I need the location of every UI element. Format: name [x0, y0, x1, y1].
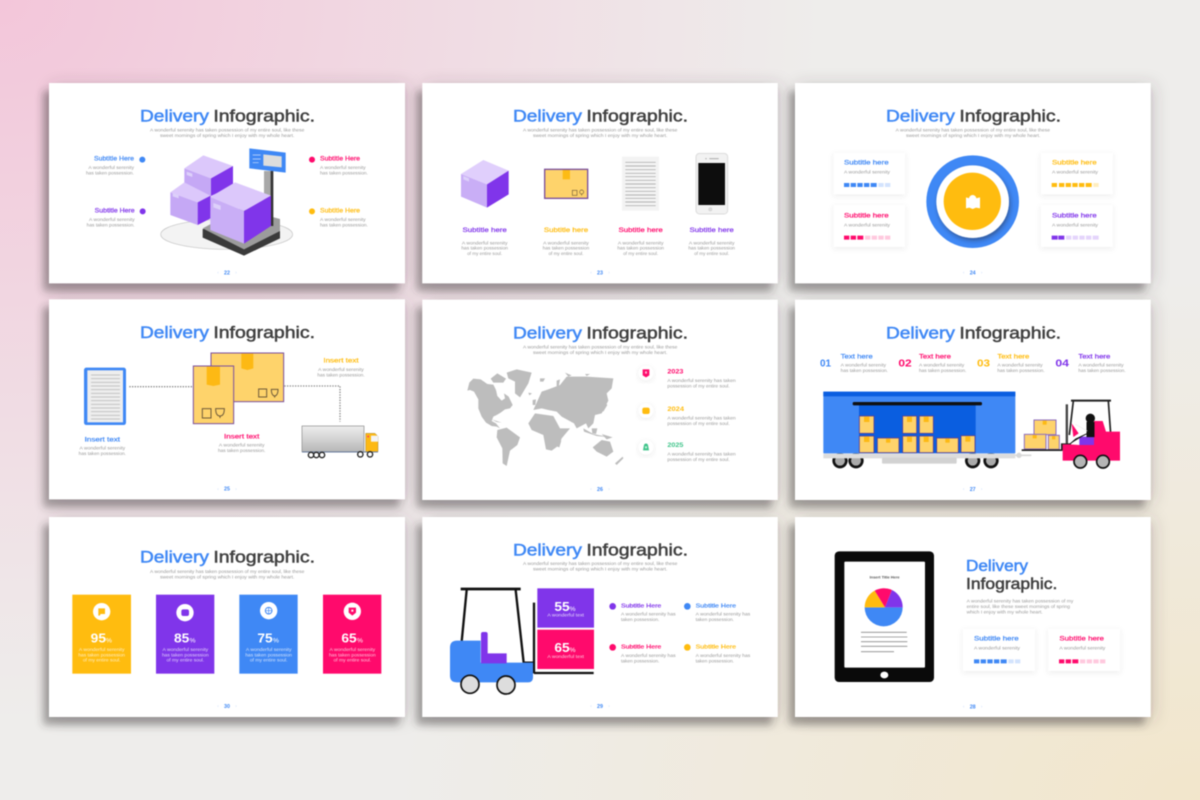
card: purple [1041, 205, 1113, 247]
item: pink subtitle: A wonderful serenity [618, 240, 664, 245]
timeline item 2024 [639, 403, 736, 426]
step 01: A wonderful serenity [841, 363, 887, 368]
card: 95%: % [106, 638, 112, 645]
callout: pink subtitle: Subtitle Here [621, 645, 661, 651]
intro text [896, 128, 1050, 138]
page number: 27 [970, 487, 976, 493]
card: 75%: % [273, 638, 279, 645]
step 01: 01 [820, 358, 831, 369]
callout: purple subtitle: A wonderful serenity has [621, 612, 676, 617]
card: yellow: Subtitle here [1052, 161, 1098, 167]
page number: ‹ [590, 270, 592, 275]
page number: ‹ [963, 487, 965, 492]
callout: yellow subtitle: Subtitle Here [696, 645, 736, 651]
text: insert blue [79, 437, 126, 456]
item: purple subtitle: Subtitle here [462, 228, 508, 234]
step 03: A wonderful serenity [997, 363, 1043, 368]
text: insert blue: A wonderful serenity [79, 446, 126, 451]
page number: 23 [597, 270, 603, 276]
icon: rear parcel [211, 353, 284, 402]
title: Infographic. [959, 324, 1061, 343]
timeline item 2023: possession of my entire soul. [667, 383, 730, 388]
page number [217, 270, 237, 276]
page number: ‹ [963, 270, 965, 275]
card: blue: Subtitle here [844, 161, 890, 167]
callout: purple subtitle: Subtitle Here [621, 603, 661, 609]
title: Delivery [513, 541, 583, 560]
icon: document [622, 157, 659, 211]
item: yellow subtitle: Subtitle here [544, 228, 589, 234]
text: insert yellow [317, 358, 365, 377]
title: Infographic. [586, 107, 688, 126]
item: pink subtitle: Subtitle here [618, 228, 664, 234]
callout: pink subtitle [309, 157, 368, 175]
timeline item 2025: 2025 [667, 442, 684, 449]
step 04: has taken possession. [1078, 368, 1126, 373]
title: Infographic. [586, 541, 688, 560]
text: insert yellow: has taken possession. [317, 372, 365, 377]
item: second purple subtitle: has taken possession [688, 246, 735, 251]
icon: document on tablet [84, 368, 126, 425]
step 01: has taken possession. [841, 368, 888, 373]
page number [590, 487, 610, 493]
timeline item 2024: possession of my entire soul. [667, 421, 730, 426]
card: 95%: A wonderful serenity [79, 647, 125, 652]
card: 65%: 65 [341, 632, 357, 646]
timeline item 2025: A wonderful serenity has taken [667, 452, 736, 457]
item: second purple subtitle: A wonderful serenity [689, 240, 735, 245]
item: yellow subtitle: of my entire soul. [548, 251, 583, 256]
card: blue [963, 629, 1035, 671]
callout: pink subtitle: A wonderful serenity [320, 165, 366, 170]
page number: › [235, 486, 237, 491]
intro text [523, 128, 678, 138]
step 01 [820, 355, 888, 373]
page number: ‹ [590, 704, 592, 709]
step 02: 02 [898, 358, 912, 369]
text: insert pink: A wonderful serenity [219, 443, 265, 448]
callout: yellow subtitle: Subtitle Here [320, 209, 361, 215]
callout: blue subtitle: A wonderful serenity [88, 165, 135, 170]
card: 75%: 75 [257, 632, 273, 646]
card: 95%: of my entire soul. [83, 658, 120, 663]
page number: › [235, 704, 237, 709]
card: 75%: has taken possession [245, 652, 292, 657]
item: second purple subtitle: Subtitle here [689, 228, 735, 234]
stat block: 65%: 65 [554, 640, 570, 655]
title: Infographic. [966, 576, 1057, 593]
icon: smartphone [696, 153, 728, 214]
page number: 29 [597, 704, 603, 710]
panel: percentage cards (slide 30) [49, 517, 405, 717]
page number: › [608, 487, 610, 492]
intro text: sweet mornings of spring which I enjoy with my whole heart. [533, 566, 667, 571]
illustration: blue forklift [450, 589, 594, 694]
page number: 25 [224, 487, 230, 493]
timeline item 2024: A wonderful serenity has taken [667, 416, 736, 421]
intro text: A wonderful serenity has taken possession of my [967, 599, 1074, 604]
card: purple: Subtitle here [1052, 213, 1098, 219]
title [140, 107, 315, 126]
page number: › [981, 270, 983, 275]
card: 85% [156, 595, 214, 674]
illustration: parcel scale with stacked boxes [161, 148, 293, 256]
card: 95%: has taken possession [78, 652, 125, 657]
icon: parcel [545, 169, 588, 198]
page number: 30 [224, 704, 230, 710]
step 03: 03 [977, 358, 991, 369]
item: yellow subtitle [543, 228, 590, 256]
page number [963, 487, 983, 493]
arrow: dashed link document to parcels [129, 385, 193, 389]
intro text: A wonderful serenity has taken possession of my entire soul, like these [896, 128, 1050, 133]
card: yellow: A wonderful serenity [1052, 170, 1099, 175]
title [886, 324, 1061, 343]
card: pink: A wonderful serenity [1059, 646, 1106, 651]
title: Delivery [140, 323, 210, 342]
intro text [967, 599, 1074, 614]
title [513, 107, 688, 126]
callout: pink subtitle: Subtitle Here [320, 157, 361, 163]
callout: blue subtitle: taken possession. [696, 617, 734, 622]
page number [217, 486, 237, 493]
title: Delivery [886, 324, 956, 343]
item: pink subtitle: has taken possession [617, 246, 664, 251]
intro text: A wonderful serenity has taken possession of my entire soul, like these [523, 561, 678, 566]
title: Delivery [140, 107, 210, 126]
page number: ‹ [217, 486, 219, 491]
step 03: Text here [997, 355, 1030, 361]
title [513, 324, 688, 343]
card: 95%: 95 [91, 632, 106, 646]
world map [467, 369, 623, 466]
title: Delivery [886, 107, 956, 126]
title: Infographic. [959, 107, 1061, 126]
step 01: Text here [841, 355, 874, 361]
card: 85%: % [190, 638, 196, 645]
stat block: 55%: 55 [554, 599, 570, 614]
step 02: Text here [919, 355, 952, 361]
intro text [523, 345, 678, 355]
stat block: 55% [537, 588, 594, 628]
arrow: dashed link parcels to truck [284, 386, 340, 422]
callout: yellow subtitle: taken possession. [696, 658, 734, 663]
callout: purple subtitle: Subtitle Here [95, 209, 135, 215]
card: blue: Subtitle here [974, 637, 1020, 643]
panel: forklift stats (slide 29) [422, 517, 778, 717]
page number [963, 270, 983, 276]
illustration: tablet with pie chart [835, 551, 934, 682]
card: 65%: of my entire soul. [333, 658, 371, 663]
item: purple subtitle: A wonderful serenity [462, 240, 508, 245]
title [140, 323, 315, 342]
callout: blue subtitle [684, 603, 751, 622]
item: yellow subtitle: A wonderful serenity [543, 240, 590, 245]
title: Infographic. [213, 323, 315, 342]
panel: progress cards with circle (slide 24) [795, 83, 1151, 283]
page number: ‹ [217, 270, 219, 275]
title: Delivery [966, 558, 1028, 575]
page number: › [608, 270, 610, 275]
intro text [150, 128, 305, 138]
intro text [150, 569, 305, 579]
panel: delivery flow (slide 25) [49, 299, 405, 499]
intro text: sweet mornings of spring which I enjoy with my whole heart. [533, 133, 667, 138]
text: insert pink [218, 434, 265, 453]
panel: tablet report (slide 28) [795, 517, 1151, 717]
callout: blue subtitle: has taken possession. [86, 170, 134, 175]
step 04 [1055, 355, 1126, 373]
item: purple subtitle [461, 228, 508, 256]
callout: pink subtitle: A wonderful serenity has [621, 653, 676, 658]
stat block: 65%: A wonderful text [547, 654, 585, 659]
stat block: 55%: A wonderful text [547, 613, 585, 618]
callout: pink subtitle [609, 644, 676, 663]
timeline item 2025 [639, 440, 736, 462]
card: 85%: A wonderful serenity [162, 647, 209, 652]
intro text: A wonderful serenity has taken possession of my entire soul, like these [150, 128, 305, 133]
page number: 24 [970, 270, 976, 276]
text: insert blue: Insert text [85, 437, 120, 443]
title: Delivery [513, 324, 583, 343]
callout: pink subtitle: has taken possession. [320, 170, 368, 175]
timeline item 2023: 2023 [667, 368, 684, 375]
item: second purple subtitle: of my entire soul. [694, 251, 729, 256]
page number: 22 [224, 270, 230, 276]
icon: front parcel [193, 366, 234, 424]
callout: blue subtitle: Subtitle Here [696, 603, 736, 609]
card: pink [834, 205, 905, 247]
panel: freight loading (slide 27) [795, 300, 1151, 500]
stat block: 65% [537, 630, 594, 669]
page number [217, 704, 237, 710]
card: pink [1048, 629, 1120, 671]
text: insert yellow: A wonderful serenity [318, 367, 365, 372]
callout: purple subtitle [87, 208, 146, 227]
panel: four delivery items (slide 23) [422, 83, 778, 283]
callout: yellow subtitle: has taken possession. [320, 222, 368, 227]
stat block: 65%: % [570, 647, 576, 654]
callout: yellow subtitle: A wonderful serenity has [696, 653, 751, 658]
intro text: sweet mornings of spring which I enjoy with my whole heart. [160, 133, 294, 138]
title: Infographic. [213, 548, 315, 567]
stat block: 55%: % [570, 606, 576, 613]
timeline item 2023 [639, 366, 736, 388]
text: insert blue: has taken possession. [79, 451, 126, 456]
icon: delivery truck [302, 426, 378, 458]
page number [590, 270, 610, 276]
card: 85%: 85 [174, 632, 189, 646]
step 04: A wonderful serenity [1078, 363, 1124, 368]
step 04: Text here [1078, 355, 1111, 361]
intro text: A wonderful serenity has taken possession of my entire soul, like these [150, 569, 305, 574]
title: Delivery [140, 548, 210, 567]
title: Infographic. [586, 324, 688, 343]
callout: yellow subtitle: A wonderful serenity [320, 217, 366, 222]
card: purple: A wonderful serenity [1052, 222, 1099, 227]
callout: purple subtitle: A wonderful serenity [89, 217, 135, 222]
card: 65%: % [357, 638, 363, 645]
page number [590, 704, 610, 710]
page number [963, 704, 983, 710]
page number: ‹ [217, 704, 219, 709]
item: purple subtitle: has taken possession [461, 246, 508, 251]
title [513, 541, 688, 560]
ring chart with map icon [926, 155, 1019, 248]
card: 65%: A wonderful serenity [329, 647, 376, 652]
item: purple subtitle: of my entire soul. [467, 251, 502, 256]
step 02: has taken possession. [919, 368, 966, 373]
intro text: A wonderful serenity has taken possession of my entire soul, like these [523, 345, 678, 350]
text: insert yellow: Insert text [323, 358, 359, 364]
item: pink subtitle [617, 228, 664, 256]
page number: › [981, 704, 983, 709]
card: blue: A wonderful serenity [974, 646, 1021, 651]
step 02: A wonderful serenity [919, 363, 965, 368]
callout: yellow subtitle [309, 208, 368, 227]
intro text: sweet mornings of spring which I enjoy with my whole heart. [160, 574, 294, 579]
text: insert pink: Insert text [224, 434, 260, 440]
card: 65%: has taken possession [329, 652, 376, 657]
title [966, 558, 1057, 593]
page number: ‹ [590, 487, 592, 492]
intro text: which I enjoy with my whole heart. [967, 609, 1043, 614]
intro text: A wonderful serenity has taken possession of my entire soul, like these [523, 128, 678, 133]
timeline item 2023: A wonderful serenity has taken [667, 378, 736, 383]
card: 85%: of my entire soul. [166, 658, 204, 663]
title [886, 107, 1061, 126]
card: 85%: has taken possession [162, 652, 209, 657]
callout: blue subtitle: Subtitle Here [94, 157, 135, 163]
card: blue [834, 153, 905, 194]
illustration: freight trailer with boxes [823, 392, 1031, 468]
callout: pink subtitle: taken possession. [621, 658, 659, 663]
intro text [523, 561, 678, 571]
card: 95% [72, 595, 131, 674]
illustration: tablet with pie chart: Insert Title Here [870, 575, 900, 579]
callout: blue subtitle [86, 157, 145, 175]
panel: scale with boxes (slide 22) [49, 83, 405, 283]
title [140, 548, 315, 567]
callout: purple subtitle: has taken possession. [87, 222, 135, 227]
title: Infographic. [213, 107, 315, 126]
card: pink: Subtitle here [844, 213, 890, 219]
intro text: sweet mornings of spring which I enjoy with my whole heart. [906, 133, 1040, 138]
title: Delivery [513, 107, 583, 126]
icon: purple cube [461, 160, 509, 208]
step 03 [977, 355, 1045, 373]
card: pink: Subtitle here [1059, 637, 1105, 643]
card: 75% [239, 595, 298, 674]
card: 75%: A wonderful serenity [246, 647, 292, 652]
page number: › [608, 704, 610, 709]
callout: blue subtitle: A wonderful serenity has [696, 612, 751, 617]
page number: ‹ [963, 704, 965, 709]
panel: world map timeline (slide 26) [422, 300, 778, 500]
text: insert pink: has taken possession. [218, 448, 265, 453]
card: 75%: of my entire soul. [250, 658, 287, 663]
step 04: 04 [1055, 358, 1070, 369]
pie chart [865, 588, 903, 626]
item: yellow subtitle: has taken possession [543, 246, 590, 251]
card: pink: A wonderful serenity [844, 222, 891, 227]
item: pink subtitle: of my entire soul. [623, 251, 658, 256]
page number: › [981, 487, 983, 492]
item: second purple subtitle [688, 228, 735, 256]
intro text: entire soul, like these sweet mornings of spring [967, 604, 1070, 609]
card: blue: A wonderful serenity [844, 170, 891, 175]
illustration: pink forklift carrying boxes [1022, 401, 1120, 468]
card: yellow [1041, 153, 1113, 194]
step 02 [898, 355, 966, 373]
card: 65% [323, 595, 381, 674]
page number: 28 [970, 704, 976, 710]
page number: › [235, 270, 237, 275]
intro text: sweet mornings of spring which I enjoy with my whole heart. [533, 350, 667, 355]
callout: yellow subtitle [684, 644, 751, 663]
step 03: has taken possession. [997, 368, 1045, 373]
page number: 26 [597, 487, 603, 493]
callout: purple subtitle: taken possession. [621, 617, 659, 622]
callout: purple subtitle [609, 603, 676, 622]
timeline item 2024: 2024 [667, 406, 684, 413]
timeline item 2025: possession of my entire soul. [667, 457, 730, 462]
